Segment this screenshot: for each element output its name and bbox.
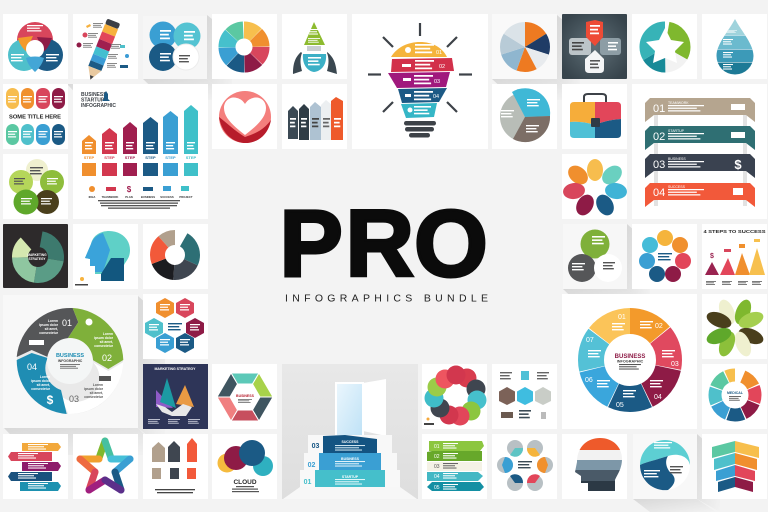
large four step cycle card: consectetur bbox=[31, 387, 51, 391]
business startup bar chart card: $ bbox=[127, 185, 132, 194]
large four step cycle card: ipsum dolor bbox=[94, 336, 114, 340]
arrow stack list card: 04 bbox=[434, 474, 440, 480]
large four step cycle card: ipsum dolor bbox=[31, 379, 51, 383]
banner 03 bbox=[645, 154, 755, 178]
business startup bar chart card: BUSINESS bbox=[81, 92, 107, 98]
dark octagon ring card: STRATEGY bbox=[28, 257, 46, 261]
business startup bar chart card: IDEA bbox=[89, 195, 95, 199]
banner 02: 02 bbox=[653, 131, 665, 143]
business startup bar chart card: STEP bbox=[84, 155, 95, 160]
three circles shadow card bbox=[568, 230, 622, 282]
four steps to success card bbox=[704, 229, 766, 285]
business startup bar chart card bbox=[81, 91, 198, 209]
eight segment ring card bbox=[227, 30, 261, 64]
book chevrons card bbox=[712, 441, 759, 492]
arrow stack list card: 03 bbox=[434, 464, 440, 470]
step 02 bbox=[304, 453, 397, 470]
banner 03: 03 bbox=[653, 159, 665, 171]
light bulb infographic bbox=[368, 23, 472, 138]
business startup bar chart card: BUSINESS bbox=[141, 195, 155, 199]
banner 02: STARTUP bbox=[668, 129, 685, 133]
main title: O bbox=[414, 191, 488, 297]
colourful star card bbox=[80, 441, 130, 490]
pencil infographic card bbox=[76, 18, 129, 82]
step 01: STARTUP bbox=[342, 475, 359, 479]
business startup bar chart card: STEP bbox=[145, 155, 156, 160]
ring of overlapping circles card bbox=[424, 366, 486, 426]
seven part puzzle ring: 06 bbox=[585, 377, 593, 384]
three arrow towers card bbox=[152, 438, 197, 493]
business startup bar chart card: STEP bbox=[165, 155, 176, 160]
banner 01: TEAMWORK bbox=[668, 101, 689, 105]
large four step cycle card: 03 bbox=[69, 394, 79, 404]
pie chart card bbox=[512, 34, 538, 60]
three hexagons card bbox=[499, 371, 551, 419]
large four step cycle card: 02 bbox=[102, 353, 112, 363]
seven part puzzle ring: INFOGRAPHIC bbox=[617, 360, 644, 364]
seven petal flower card bbox=[562, 159, 628, 219]
four steps to success card: 4 STEPS TO SUCCESS bbox=[704, 229, 766, 234]
green eight petal flower card bbox=[704, 297, 766, 359]
business startup bar chart card: PROJECT bbox=[179, 195, 193, 199]
ribbon banner list card bbox=[645, 98, 755, 207]
arrow stack list card bbox=[427, 441, 484, 491]
large four step cycle card: BUSINESS bbox=[56, 353, 84, 359]
seven part puzzle ring: 03 bbox=[671, 361, 679, 368]
banner 01 bbox=[645, 98, 755, 122]
banner 01: 01 bbox=[653, 103, 665, 115]
seven part puzzle ring: 01 bbox=[618, 314, 626, 321]
large four step cycle card: Lorem bbox=[48, 319, 58, 323]
large four step cycle card: Lorem bbox=[103, 332, 113, 336]
large four step cycle card: Lorem bbox=[93, 383, 103, 387]
seven part puzzle ring: 07 bbox=[586, 337, 594, 344]
arrow stack list card: 02 bbox=[434, 454, 440, 460]
step 01: 01 bbox=[304, 479, 311, 486]
arrow stack list card: 05 bbox=[434, 485, 440, 491]
heart ring card bbox=[219, 91, 271, 143]
segment 04 bbox=[17, 353, 67, 414]
large four step cycle card: ipsum dolor bbox=[84, 387, 104, 391]
business startup bar chart card: TEAMWORK bbox=[102, 195, 118, 199]
seven circles ring card bbox=[639, 230, 691, 282]
banner 04: SUCCESS bbox=[668, 185, 686, 189]
main title: P bbox=[280, 191, 343, 297]
step 01 bbox=[300, 470, 400, 487]
medical eight segment ring card: MEDICAL bbox=[727, 391, 744, 395]
four steps to success card: $ bbox=[710, 253, 714, 260]
large four step cycle card: consectetur bbox=[84, 395, 104, 399]
large four step cycle card: ipsum dolor bbox=[39, 323, 59, 327]
pill tiles card with title: SOME TITLE HERE bbox=[9, 114, 61, 120]
business startup bar chart card: STEP bbox=[125, 155, 136, 160]
large four step cycle card: sit amet, bbox=[37, 383, 50, 387]
step 03 bbox=[308, 435, 392, 453]
hexagon loop card: BUSINESS bbox=[236, 394, 255, 398]
large four step cycle card: sit amet, bbox=[45, 327, 58, 331]
star ring card bbox=[646, 28, 684, 64]
banner 04 bbox=[645, 183, 755, 207]
large four step cycle card: Lorem bbox=[40, 375, 50, 379]
head profile card bbox=[75, 231, 130, 286]
step 03: SUCCESS bbox=[342, 440, 359, 444]
seven part puzzle ring bbox=[585, 314, 679, 409]
business startup bar chart card: STEP bbox=[186, 155, 197, 160]
large four step cycle card: sit amet, bbox=[90, 391, 103, 395]
subtitle: INFOGRAPHICS BUNDLE bbox=[285, 292, 488, 304]
large four step cycle card: INFOGRAPHIC bbox=[58, 359, 83, 363]
rocket card bbox=[293, 22, 337, 74]
light bulb infographic: 01 bbox=[436, 50, 442, 56]
green flower card bbox=[9, 159, 64, 214]
marketing strategy dark chart card: MARKETING STRATEGY bbox=[155, 367, 196, 371]
business startup bar chart card: PLAN bbox=[125, 195, 133, 199]
segment 01 bbox=[17, 308, 78, 357]
cloud card: CLOUD bbox=[233, 479, 257, 486]
large four step cycle card: sit amet, bbox=[100, 340, 113, 344]
pill tiles card with title bbox=[6, 88, 65, 145]
step 02: 02 bbox=[308, 462, 315, 469]
light bulb infographic: 02 bbox=[439, 64, 445, 70]
large four step cycle card: consectetur bbox=[94, 344, 114, 348]
segment 03 bbox=[60, 362, 123, 414]
six circles card bbox=[497, 440, 553, 491]
cloud card bbox=[218, 440, 273, 492]
overlapping circles card bbox=[149, 22, 200, 71]
seven part puzzle ring: 05 bbox=[616, 402, 624, 409]
hexagon ring card bbox=[145, 298, 204, 353]
banner 03: $ bbox=[734, 157, 742, 172]
segment 02 bbox=[67, 308, 123, 369]
business startup bar chart card: STARTUP bbox=[81, 98, 105, 104]
large four step cycle card: 01 bbox=[62, 318, 72, 328]
door and stairs card bbox=[282, 364, 418, 499]
dark octagon ring card: MARKETING bbox=[27, 253, 47, 257]
venn diagram card bbox=[8, 22, 63, 72]
briefcase card bbox=[570, 94, 621, 138]
light bulb infographic: 03 bbox=[434, 79, 440, 85]
step 02: BUSINESS bbox=[341, 457, 360, 461]
arrow stack list card: 01 bbox=[434, 444, 440, 450]
business startup bar chart card: INFOGRAPHIC bbox=[81, 103, 116, 109]
hexagon loop card bbox=[217, 373, 273, 421]
water drop card bbox=[716, 19, 754, 74]
yin yang circle shadow card bbox=[640, 440, 690, 490]
marketing strategy dark chart card bbox=[143, 364, 208, 429]
seven part puzzle ring: BUSINESS bbox=[615, 354, 645, 360]
dark octagon ring card bbox=[3, 224, 68, 288]
seven part puzzle ring: 04 bbox=[654, 394, 662, 401]
banner 03: BUSINESS bbox=[668, 157, 686, 161]
medical eight segment ring card bbox=[715, 375, 755, 415]
large four step cycle card: consectetur bbox=[39, 331, 59, 335]
head slices card bbox=[575, 438, 622, 491]
banner 04: 04 bbox=[653, 187, 665, 199]
five arrow columns card bbox=[288, 97, 343, 140]
large four step cycle card: $ bbox=[47, 393, 54, 407]
seven part puzzle ring: 02 bbox=[655, 323, 663, 330]
large four step cycle card: 04 bbox=[27, 362, 37, 372]
five segment ring card bbox=[158, 238, 192, 272]
three slice pie card bbox=[500, 88, 550, 142]
large four step cycle card bbox=[17, 308, 123, 414]
banner 02 bbox=[645, 126, 755, 150]
business startup bar chart card: STEP bbox=[104, 155, 115, 160]
business startup bar chart card: SUCCESS bbox=[160, 195, 174, 199]
dark cross card bbox=[562, 14, 627, 79]
main title: R bbox=[346, 191, 414, 297]
light bulb infographic: 04 bbox=[433, 94, 439, 100]
step 03: 03 bbox=[312, 443, 319, 450]
stacked arrow list card bbox=[8, 443, 61, 491]
